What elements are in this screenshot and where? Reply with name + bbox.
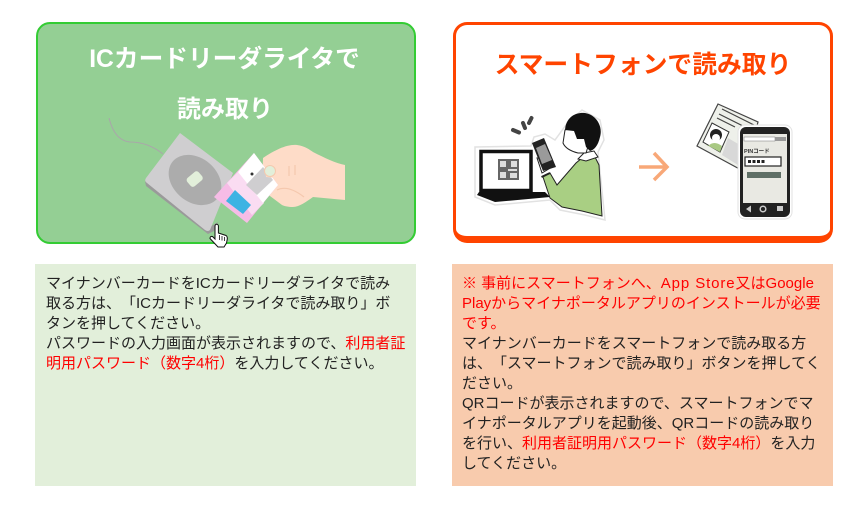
- text block: IC card reader instructions: パスワードの入力画面が表示されますので、利用者証: [46, 335, 405, 352]
- text block: smartphone instructions: イナポータルアプリを起動後、QRコードの読み取り: [462, 415, 814, 432]
- text block: IC card reader instructions: 明用パスワード（数字4桁）を入力してください。: [46, 355, 383, 372]
- heading: smartphone: スマートフォンで読み取り: [495, 51, 791, 79]
- icon: card reader: [109, 118, 233, 234]
- heading: IC card reader line 1: ICカードリーダライタで: [89, 44, 360, 73]
- text block: smartphone instructions: ださい。: [462, 375, 522, 392]
- icon: pointer cursor: [210, 224, 227, 247]
- heading: IC card reader line 2: 読み取り: [177, 96, 273, 123]
- text block: smartphone instructions: [452, 264, 833, 486]
- text block: smartphone instructions: Playからマイナポータルアプリのインストールが必要: [462, 295, 821, 312]
- panel: IC card reader button: [36, 22, 416, 244]
- text block: IC card reader instructions: タンを押してください。: [46, 315, 210, 332]
- icon: person scanning QR code with smartphone: [475, 110, 605, 220]
- text block: IC card reader instructions: [35, 264, 416, 486]
- text block: smartphone instructions: マイナンバーカードをスマートフォンで読み取る方: [462, 335, 806, 352]
- text block: smartphone instructions: QRコードが表示されますので、スマートフォンでマ: [462, 395, 813, 412]
- arrow: [639, 153, 667, 180]
- label: PIN code: PINコード: [744, 148, 770, 155]
- text block: smartphone instructions: を行い、利用者証明用パスワード（数字4桁）を入力: [462, 435, 815, 452]
- text block: smartphone instructions: ※ 事前にスマートフォンへ、App Store又はGoogle: [462, 275, 814, 292]
- text block: IC card reader instructions: 取る方は、「ICカードリーダライタで読み取り」ボ: [46, 295, 390, 312]
- text block: smartphone instructions: は、「スマートフォンで読み取り」ボタンを押してく: [462, 355, 821, 372]
- icon: hand holding card: [214, 145, 345, 223]
- icon: ID card and smartphone PIN screen: [697, 104, 792, 219]
- text block: smartphone instructions: してください。: [462, 455, 566, 472]
- panel: smartphone button: [453, 22, 833, 243]
- text block: IC card reader instructions: マイナンバーカードをICカードリーダライタで読み: [46, 275, 390, 292]
- text block: smartphone instructions: です。: [462, 315, 506, 332]
